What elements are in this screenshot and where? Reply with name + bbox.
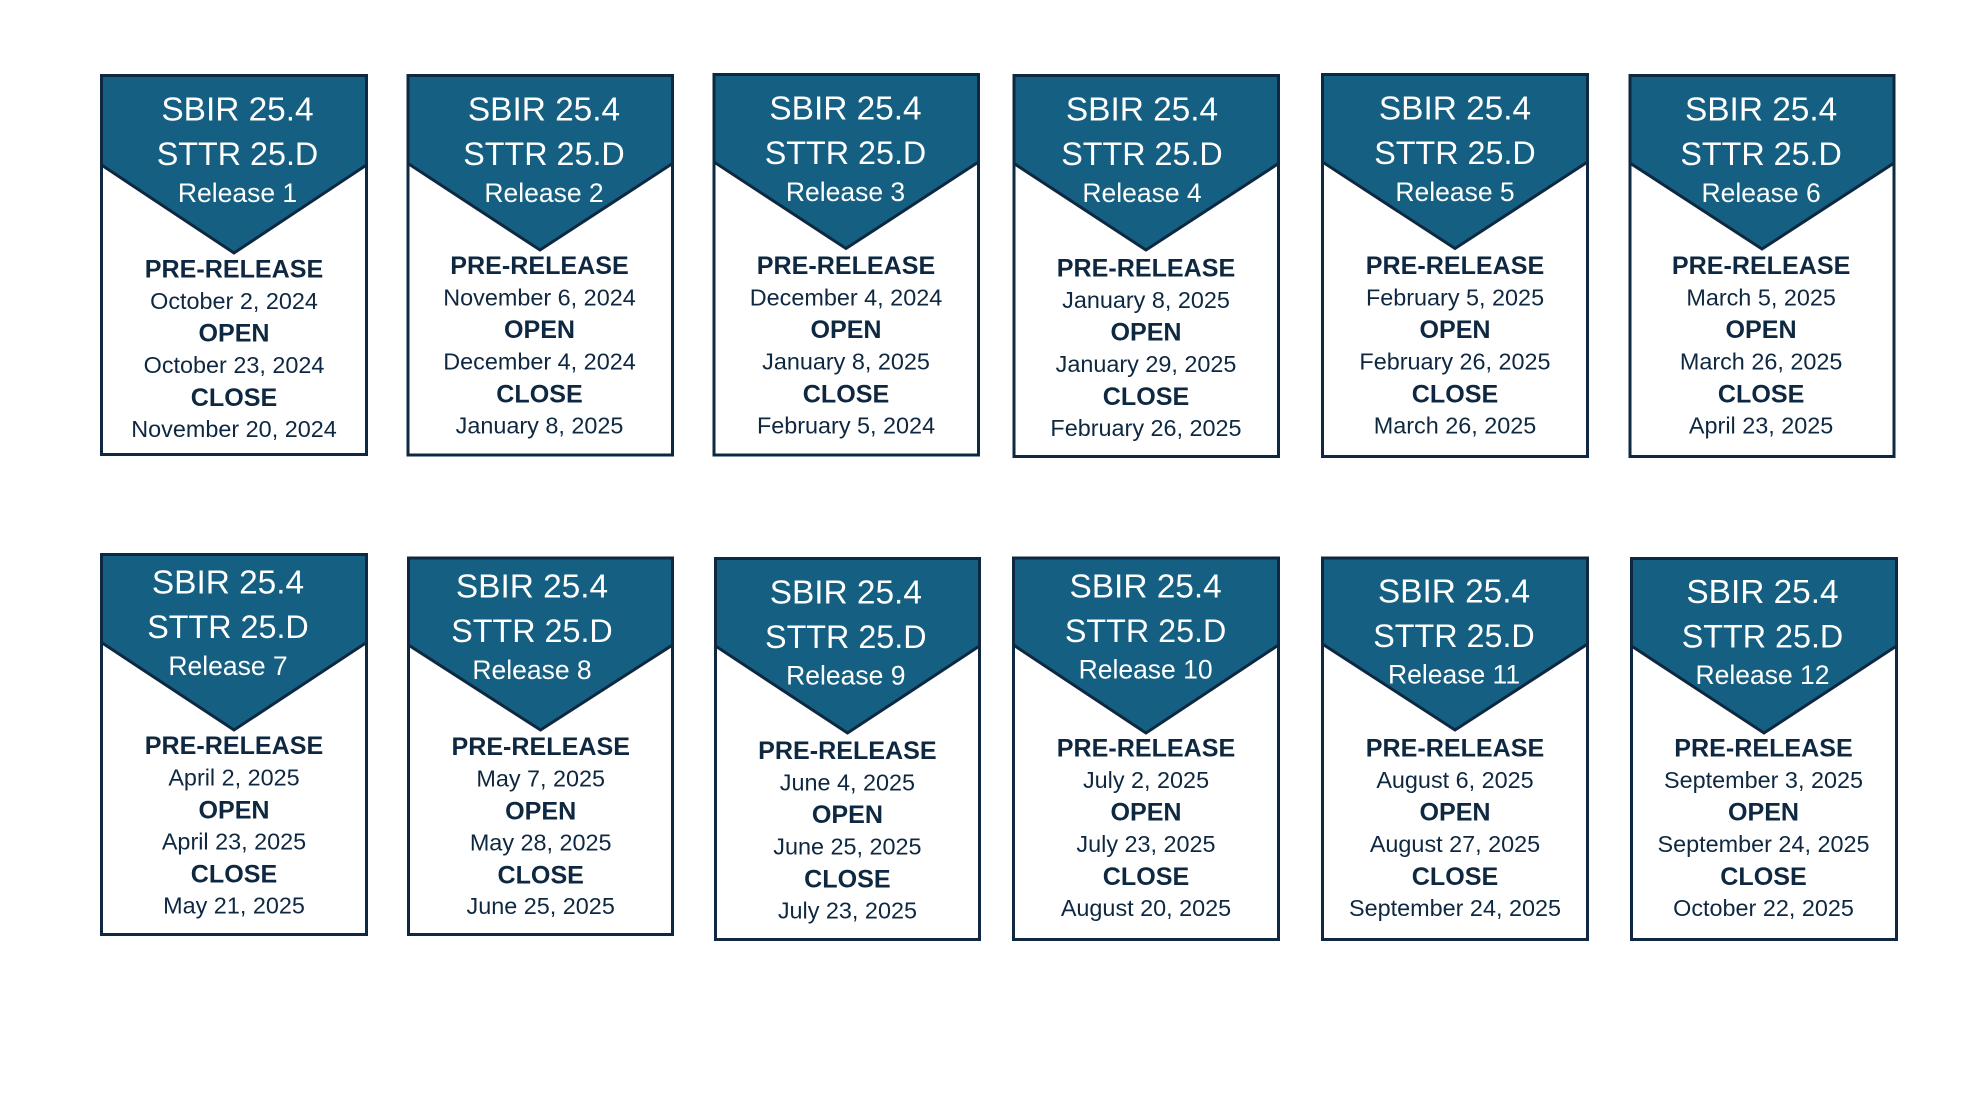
heading: Release 6: SBIR 25.4 xyxy=(1685,92,1837,129)
card: Release 10 xyxy=(1014,558,1278,940)
dates: Release 10: July 2, 2025 xyxy=(1083,767,1209,793)
heading: Release 2: SBIR 25.4 xyxy=(468,92,620,129)
dates: Release 2: December 4, 2024 xyxy=(443,348,636,374)
dates: Release 3: OPEN xyxy=(810,316,882,344)
heading: Release 4: STTR 25.D xyxy=(1061,136,1223,172)
dates: Release 5: PRE-RELEASE xyxy=(1366,252,1544,280)
dates: Release 10: August 20, 2025 xyxy=(1061,895,1231,921)
dates: Release 9: July 23, 2025 xyxy=(778,898,917,924)
dates: Release 5: CLOSE xyxy=(1412,380,1498,408)
heading: Release 10 xyxy=(1065,568,1226,684)
heading: Release 3: STTR 25.D xyxy=(765,135,926,171)
heading: Release 8: Release 8 xyxy=(472,655,592,685)
heading: Release 4: SBIR 25.4 xyxy=(1066,92,1218,129)
dates: Release 2: OPEN xyxy=(504,316,575,344)
dates: Release 11 xyxy=(1349,734,1561,921)
dates: Release 8 xyxy=(451,733,630,919)
card: Release 12 xyxy=(1632,558,1896,940)
dates: Release 5: February 26, 2025 xyxy=(1359,348,1551,374)
dates: Release 10 xyxy=(1057,734,1235,921)
heading: Release 6: Release 6 xyxy=(1701,178,1821,208)
dates: Release 8: June 25, 2025 xyxy=(467,893,615,919)
heading: Release 6 xyxy=(1680,92,1842,208)
dates: Release 9 xyxy=(758,737,937,924)
banner: Release 12 xyxy=(1632,558,1896,733)
banner: Release 5 xyxy=(1322,74,1588,248)
dates: Release 12: CLOSE xyxy=(1720,863,1807,891)
heading: Release 11: Release 11 xyxy=(1388,660,1520,690)
dates: Release 7: May 21, 2025 xyxy=(163,892,305,918)
dates: Release 4: January 29, 2025 xyxy=(1056,351,1236,377)
dates: Release 1: October 23, 2024 xyxy=(144,352,324,378)
dates: Release 5: March 26, 2025 xyxy=(1374,412,1536,438)
dates: Release 4 xyxy=(1050,254,1242,441)
banner: Release 2 xyxy=(408,76,672,250)
dates: Release 6: OPEN xyxy=(1726,316,1797,344)
dates: Release 8: May 7, 2025 xyxy=(476,766,605,792)
heading: Release 3 xyxy=(765,90,926,207)
heading: Release 9: Release 9 xyxy=(786,660,905,690)
banner: Release 9 xyxy=(716,558,980,733)
dates: Release 1: November 20, 2024 xyxy=(131,416,337,442)
dates: Release 2 xyxy=(443,252,636,438)
dates: Release 9: June 25, 2025 xyxy=(773,834,922,860)
card: Release 9 xyxy=(716,558,980,940)
dates: Release 2: PRE-RELEASE xyxy=(450,252,629,280)
heading: Release 1: Release 1 xyxy=(178,178,297,208)
dates: Release 9: June 4, 2025 xyxy=(780,770,915,796)
dates: Release 1: October 2, 2024 xyxy=(150,288,318,314)
heading: Release 1: SBIR 25.4 xyxy=(161,92,314,129)
banner: Release 6 xyxy=(1630,76,1894,249)
heading: Release 1: STTR 25.D xyxy=(157,136,318,172)
heading: Release 6: STTR 25.D xyxy=(1680,136,1842,172)
heading: Release 11: SBIR 25.4 xyxy=(1378,574,1530,610)
banner: Release 11 xyxy=(1322,558,1588,730)
dates: Release 3: PRE-RELEASE xyxy=(757,252,935,280)
dates: Release 8: PRE-RELEASE xyxy=(451,733,630,761)
card: Release 1 xyxy=(102,76,366,454)
dates: Release 6: PRE-RELEASE xyxy=(1672,252,1850,280)
dates: Release 1: OPEN xyxy=(198,320,270,348)
dates: Release 6 xyxy=(1672,252,1850,438)
heading: Release 12 xyxy=(1682,574,1843,690)
dates: Release 12: PRE-RELEASE xyxy=(1674,734,1853,762)
dates: Release 4: CLOSE xyxy=(1103,383,1189,411)
dates: Release 8: OPEN xyxy=(505,798,576,826)
dates: Release 5: February 5, 2025 xyxy=(1366,284,1544,310)
heading: Release 4: Release 4 xyxy=(1082,178,1202,208)
dates: Release 11: August 27, 2025 xyxy=(1370,831,1540,857)
dates: Release 6: March 5, 2025 xyxy=(1686,284,1836,310)
dates: Release 10: OPEN xyxy=(1110,798,1182,826)
heading: Release 5 xyxy=(1374,90,1536,207)
banner: Release 1 xyxy=(102,76,366,253)
heading: Release 7 xyxy=(147,565,309,681)
dates: Release 11: September 24, 2025 xyxy=(1349,895,1561,921)
card: Release 11 xyxy=(1322,558,1588,940)
dates: Release 3: December 4, 2024 xyxy=(750,284,942,310)
card: Release 6 xyxy=(1630,76,1894,456)
dates: Release 4: February 26, 2025 xyxy=(1050,415,1242,441)
dates: Release 5: OPEN xyxy=(1419,316,1491,344)
dates: Release 9: PRE-RELEASE xyxy=(758,737,937,765)
heading: Release 3: SBIR 25.4 xyxy=(769,90,922,128)
banner: Release 4 xyxy=(1014,76,1278,250)
dates: Release 9: CLOSE xyxy=(804,866,891,894)
dates: Release 7 xyxy=(145,732,323,918)
dates: Release 11: PRE-RELEASE xyxy=(1366,734,1544,762)
dates: Release 7: PRE-RELEASE xyxy=(145,732,323,760)
heading: Release 9 xyxy=(765,574,927,690)
dates: Release 3: CLOSE xyxy=(803,380,889,408)
dates: Release 1 xyxy=(131,256,337,442)
banner: Release 8 xyxy=(408,558,672,730)
dates: Release 5 xyxy=(1359,252,1551,438)
heading: Release 12: STTR 25.D xyxy=(1682,618,1843,654)
heading: Release 11: STTR 25.D xyxy=(1373,618,1535,654)
heading: Release 8: SBIR 25.4 xyxy=(456,568,608,605)
heading: Release 12: SBIR 25.4 xyxy=(1686,574,1839,611)
banner: Release 3 xyxy=(714,74,978,248)
dates: Release 2: CLOSE xyxy=(496,380,583,408)
card: Release 2 xyxy=(408,76,672,455)
heading: Release 9: SBIR 25.4 xyxy=(770,574,922,612)
heading: Release 8: STTR 25.D xyxy=(451,613,613,649)
banner: Release 7 xyxy=(102,554,366,730)
heading: Release 9: STTR 25.D xyxy=(765,619,927,655)
dates: Release 12: October 22, 2025 xyxy=(1673,895,1854,921)
dates: Release 4: OPEN xyxy=(1110,318,1182,346)
dates: Release 10: CLOSE xyxy=(1103,863,1189,891)
dates: Release 3: February 5, 2024 xyxy=(757,412,935,438)
dates: Release 7: April 23, 2025 xyxy=(162,828,306,854)
dates: Release 3: January 8, 2025 xyxy=(762,348,930,374)
heading: Release 11 xyxy=(1373,574,1535,690)
dates: Release 7: OPEN xyxy=(198,796,270,824)
heading: Release 12: Release 12 xyxy=(1695,660,1830,690)
dates: Release 12: September 24, 2025 xyxy=(1658,831,1869,857)
dates: Release 4: January 8, 2025 xyxy=(1062,287,1230,313)
dates: Release 9: OPEN xyxy=(812,801,883,829)
heading: Release 2: STTR 25.D xyxy=(463,136,625,172)
dates: Release 10: July 23, 2025 xyxy=(1076,831,1216,857)
dates: Release 11: August 6, 2025 xyxy=(1376,767,1534,793)
heading: Release 1 xyxy=(157,92,318,208)
dates: Release 11: CLOSE xyxy=(1412,863,1498,891)
dates: Release 10: PRE-RELEASE xyxy=(1057,734,1235,762)
heading: Release 7: SBIR 25.4 xyxy=(152,565,304,602)
heading: Release 8 xyxy=(451,568,613,685)
dates: Release 6: March 26, 2025 xyxy=(1680,348,1842,374)
dates: Release 11: OPEN xyxy=(1419,798,1491,826)
heading: Release 5: Release 5 xyxy=(1395,177,1515,207)
dates: Release 1: CLOSE xyxy=(191,384,277,412)
card: Release 4 xyxy=(1014,76,1278,456)
heading: Release 3: Release 3 xyxy=(786,177,905,207)
heading: Release 2: Release 2 xyxy=(484,178,604,208)
dates: Release 3 xyxy=(750,252,942,438)
card: Release 3 xyxy=(714,74,978,455)
dates: Release 7: CLOSE xyxy=(191,860,277,888)
heading: Release 7: STTR 25.D xyxy=(147,609,309,645)
dates: Release 6: April 23, 2025 xyxy=(1689,412,1833,438)
card: Release 8 xyxy=(408,558,672,934)
heading: Release 7: Release 7 xyxy=(168,651,288,681)
card: Release 7 xyxy=(102,554,366,934)
heading: Release 4 xyxy=(1061,92,1223,208)
dates: Release 8: CLOSE xyxy=(497,862,584,890)
heading: Release 10: Release 10 xyxy=(1079,654,1213,684)
dates: Release 12: September 3, 2025 xyxy=(1664,767,1863,793)
dates: Release 8: May 28, 2025 xyxy=(470,830,612,856)
dates: Release 2: November 6, 2024 xyxy=(443,284,636,310)
heading: Release 10: SBIR 25.4 xyxy=(1069,568,1222,605)
card: Release 5 xyxy=(1322,74,1588,456)
heading: Release 5: SBIR 25.4 xyxy=(1379,90,1531,128)
heading: Release 10: STTR 25.D xyxy=(1065,613,1226,649)
dates: Release 12: OPEN xyxy=(1728,798,1799,826)
dates: Release 12 xyxy=(1658,734,1869,921)
banner: Release 10 xyxy=(1014,558,1278,733)
heading: Release 5: STTR 25.D xyxy=(1374,135,1536,171)
dates: Release 2: January 8, 2025 xyxy=(456,412,623,438)
dates: Release 6: CLOSE xyxy=(1718,380,1804,408)
heading: Release 2 xyxy=(463,92,625,208)
dates: Release 7: April 2, 2025 xyxy=(168,764,300,790)
dates: Release 4: PRE-RELEASE xyxy=(1057,254,1235,282)
dates: Release 1: PRE-RELEASE xyxy=(145,256,323,284)
